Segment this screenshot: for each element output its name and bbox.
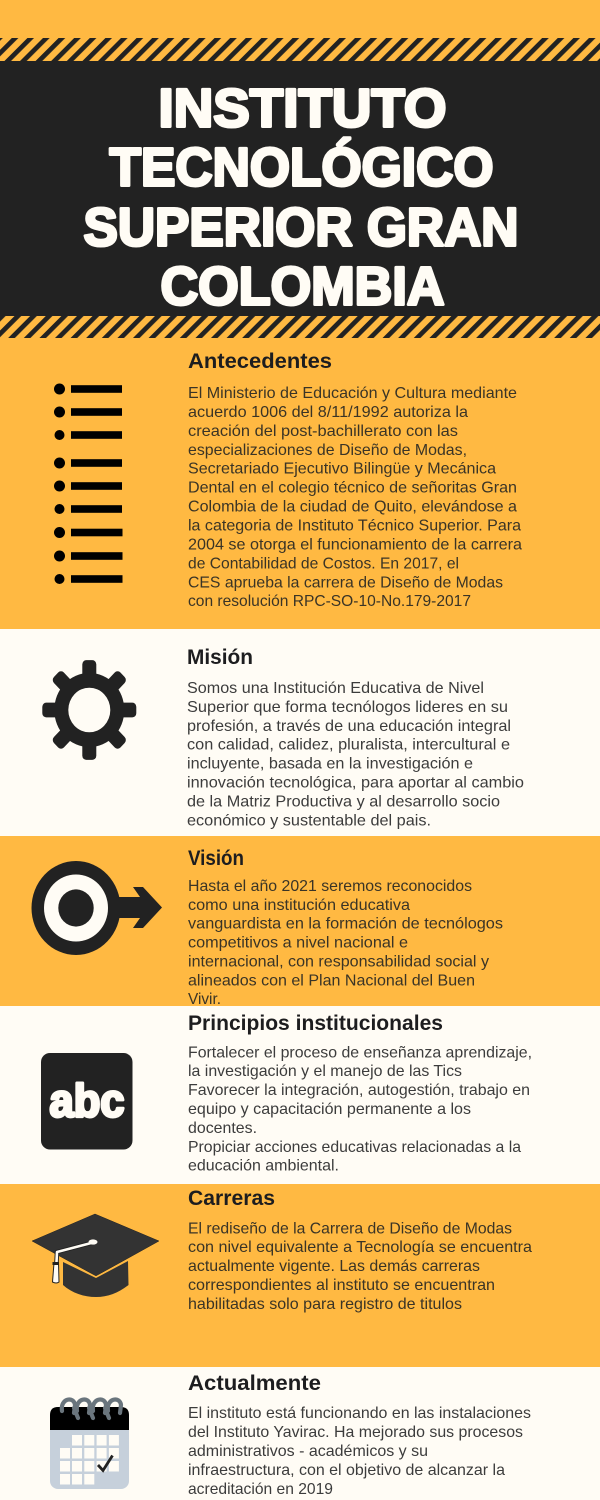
panel: Misión	[0, 629, 600, 836]
text: Misión: Somos una Institución Educativa de Nivel	[187, 680, 484, 697]
text: Actualmente	[188, 1405, 531, 1498]
panel: header	[0, 0, 600, 338]
panel: Visión	[0, 836, 600, 1008]
text: Visión: Hasta el año 2021 seremos reconocidos	[188, 878, 472, 895]
heading: Antecedentes: Antecedentes	[188, 349, 332, 373]
text: Antecedentes: con resolución RPC-SO-10-No.179-2017	[188, 593, 471, 610]
panel: Antecedentes	[0, 338, 600, 629]
text: Misión: incluyente, basada en la investigación e	[187, 756, 473, 773]
text: Antecedentes: El Ministerio de Educación y Cultura mediante	[188, 385, 517, 402]
icon: calendar	[50, 1399, 129, 1489]
title: TECNOLÓGICO	[110, 138, 494, 198]
text: Visión: alineados con el Plan Nacional del Buen	[188, 972, 475, 989]
panel: Carreras	[0, 1184, 600, 1367]
panel: Actualmente	[0, 1367, 600, 1500]
text: Misión: innovación tecnológica, para aportar al cambio	[187, 774, 524, 792]
text: Actualmente: infraestructura, con el objetivo de alcanzar la	[188, 1462, 505, 1479]
text: Antecedentes: de Contabilidad de Costos. En 2017, el	[188, 555, 459, 572]
icon: graduation cap	[32, 1214, 159, 1297]
text: Actualmente: del Instituto Yavirac. Ha mejorado sus procesos	[188, 1424, 523, 1441]
text: Actualmente: administrativos - académicos y su	[188, 1443, 428, 1460]
text: Antecedentes: Colombia de la ciudad de Quito, elevándose a	[188, 499, 517, 516]
title: SUPERIOR GRAN	[84, 198, 518, 258]
text: Actualmente: acreditación en 2019	[188, 1481, 333, 1498]
heading: Misión: Misión	[187, 645, 253, 669]
text: Antecedentes: especializaciones de Diseño de Modas,	[188, 442, 467, 459]
text: Principios institucionales	[188, 1044, 532, 1175]
text: Antecedentes: Secretariado Ejecutivo Bilingüe y Mecánica	[188, 461, 496, 478]
icon: target with arrow	[32, 861, 162, 955]
text: Carreras: correspondientes al instituto se encuentran	[188, 1277, 495, 1294]
text: Carreras	[188, 1220, 532, 1313]
text: Principios institucionales: Propiciar acciones educativas relacionadas a la	[188, 1139, 521, 1156]
panel: Principios institucionales	[0, 1006, 600, 1184]
heading: Visión: Visión	[188, 846, 244, 870]
heading: Principios institucionales: Principios institucionales	[188, 1011, 443, 1035]
text: Misión: profesión, a través de una educación integral	[187, 718, 511, 735]
text: Misión: con calidad, calidez, pluralista, intercultural e	[187, 737, 510, 754]
text: Actualmente: El instituto está funcionando en las instalaciones	[188, 1405, 531, 1422]
text: Misión: de la Matriz Productiva y al desarrollo socio	[187, 793, 500, 810]
text: Antecedentes: creación del post-bachillerato con las	[188, 423, 458, 440]
text: Principios institucionales: docentes.	[188, 1120, 257, 1137]
title: COLOMBIA	[160, 256, 444, 316]
text: Principios institucionales: la investigación y el manejo de las Tics	[188, 1063, 462, 1080]
text: Misión: económico y sustentable del pais.	[187, 812, 431, 829]
text: Antecedentes: acuerdo 1006 del 8/11/1992 autoriza la	[188, 404, 468, 421]
text: Principios institucionales: educación ambiental.	[188, 1158, 339, 1175]
text: Principios institucionales: equipo y capacitación permanente a los	[188, 1101, 471, 1118]
title: INSTITUTO	[158, 78, 446, 138]
text: Antecedentes	[188, 385, 522, 610]
heading: Carreras: Carreras	[188, 1186, 275, 1210]
text: Visión: internacional, con responsabilidad social y	[188, 954, 489, 970]
text: Visión	[188, 878, 503, 1008]
text: Antecedentes: la categoria de Instituto Técnico Superior. Para	[188, 518, 521, 534]
text: Antecedentes: Dental en el colegio técnico de señoritas Gran	[188, 480, 517, 497]
text: Principios institucionales: Fortalecer el proceso de enseñanza aprendizaje,	[188, 1044, 532, 1061]
text: Visión: competitivos a nivel nacional e	[188, 935, 408, 952]
text: Carreras: con nivel equivalente a Tecnología se encuentra	[188, 1239, 532, 1256]
text: Carreras: El rediseño de la Carrera de Diseño de Modas	[188, 1220, 512, 1237]
icon: abc: abc	[50, 1074, 124, 1126]
icon: list	[54, 384, 122, 584]
text: Antecedentes: 2004 se otorga el funcionamiento de la carrera	[188, 536, 522, 553]
text: Visión: como una institución educativa	[188, 897, 410, 914]
icon: gear	[42, 660, 136, 760]
text: Principios institucionales: Favorecer la integración, autogestión, trabajo en	[188, 1082, 530, 1099]
text: Visión: vanguardista en la formación de tecnólogos	[188, 916, 503, 933]
title	[84, 78, 518, 316]
text: Antecedentes: CES aprueba la carrera de Diseño de Modas	[188, 574, 503, 591]
text: Visión: Vivir.	[188, 991, 221, 1008]
text: Carreras: actualmente vigente. Las demás carreras	[188, 1258, 480, 1275]
text: Misión	[187, 680, 524, 829]
icon: abc	[41, 1053, 132, 1150]
text: Misión: Superior que forma tecnólogos lideres en su	[187, 699, 508, 716]
heading: Actualmente: Actualmente	[188, 1371, 321, 1395]
text: Carreras: habilitadas solo para registro de titulos	[188, 1296, 462, 1313]
